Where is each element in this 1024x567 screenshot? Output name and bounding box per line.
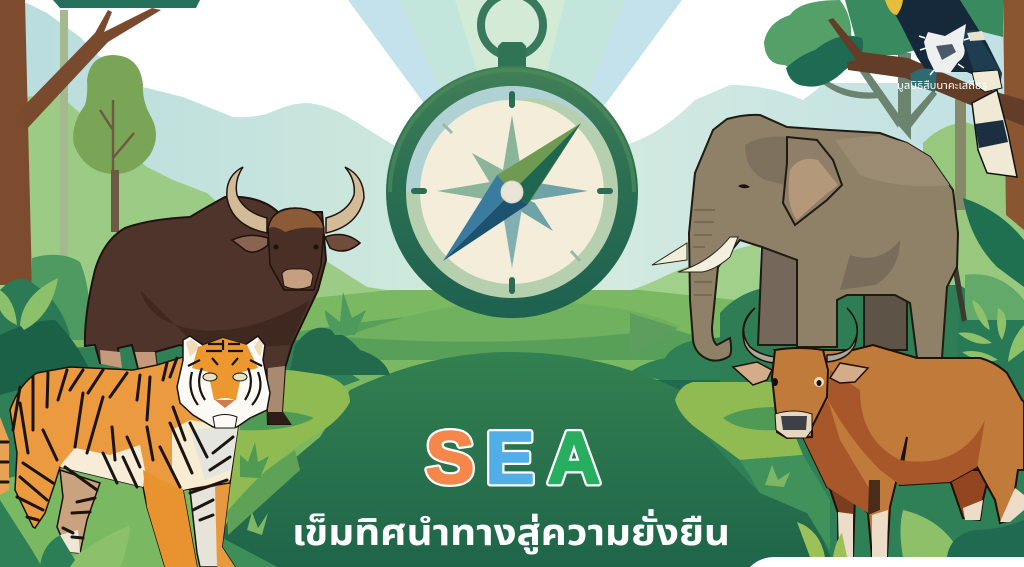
elephant bbox=[652, 115, 967, 361]
top-left banner fragment bbox=[53, 0, 200, 8]
left trees bbox=[0, 0, 161, 285]
foundation name: มูลนิธิสืบนาคะเสถียร bbox=[897, 80, 987, 92]
right front leaves bbox=[750, 510, 1024, 567]
right trees bbox=[764, 0, 1024, 230]
tiger bbox=[0, 336, 270, 567]
foundation logo bbox=[897, 24, 987, 92]
subtitle: เข็มทิศนำทางสู่ความยั่งยืน bbox=[292, 508, 730, 554]
left foliage bbox=[0, 255, 390, 395]
title SEA: A bbox=[548, 418, 600, 499]
body bbox=[10, 357, 238, 567]
far front leg bbox=[190, 483, 235, 567]
title SEA: A bbox=[548, 418, 600, 499]
tail bbox=[0, 417, 9, 495]
gaur bbox=[85, 167, 364, 424]
left front leaves bbox=[0, 500, 130, 567]
title SEA: S bbox=[426, 418, 474, 499]
background hills bbox=[0, 3, 1024, 340]
compass needle bbox=[443, 123, 581, 261]
banteng bbox=[733, 308, 1024, 557]
far hind leg bbox=[57, 470, 100, 553]
tiger head bbox=[177, 336, 270, 428]
meadow bbox=[0, 285, 1024, 567]
title SEA: E bbox=[486, 418, 534, 499]
compass bbox=[386, 0, 638, 318]
title SEA: S bbox=[426, 418, 474, 499]
tiger stripes bbox=[0, 358, 233, 538]
title SEA bbox=[426, 418, 600, 499]
compass rose bbox=[437, 115, 588, 268]
hornbill bbox=[885, 0, 1017, 177]
title SEA: E bbox=[486, 418, 534, 499]
right foliage bbox=[955, 198, 1024, 390]
